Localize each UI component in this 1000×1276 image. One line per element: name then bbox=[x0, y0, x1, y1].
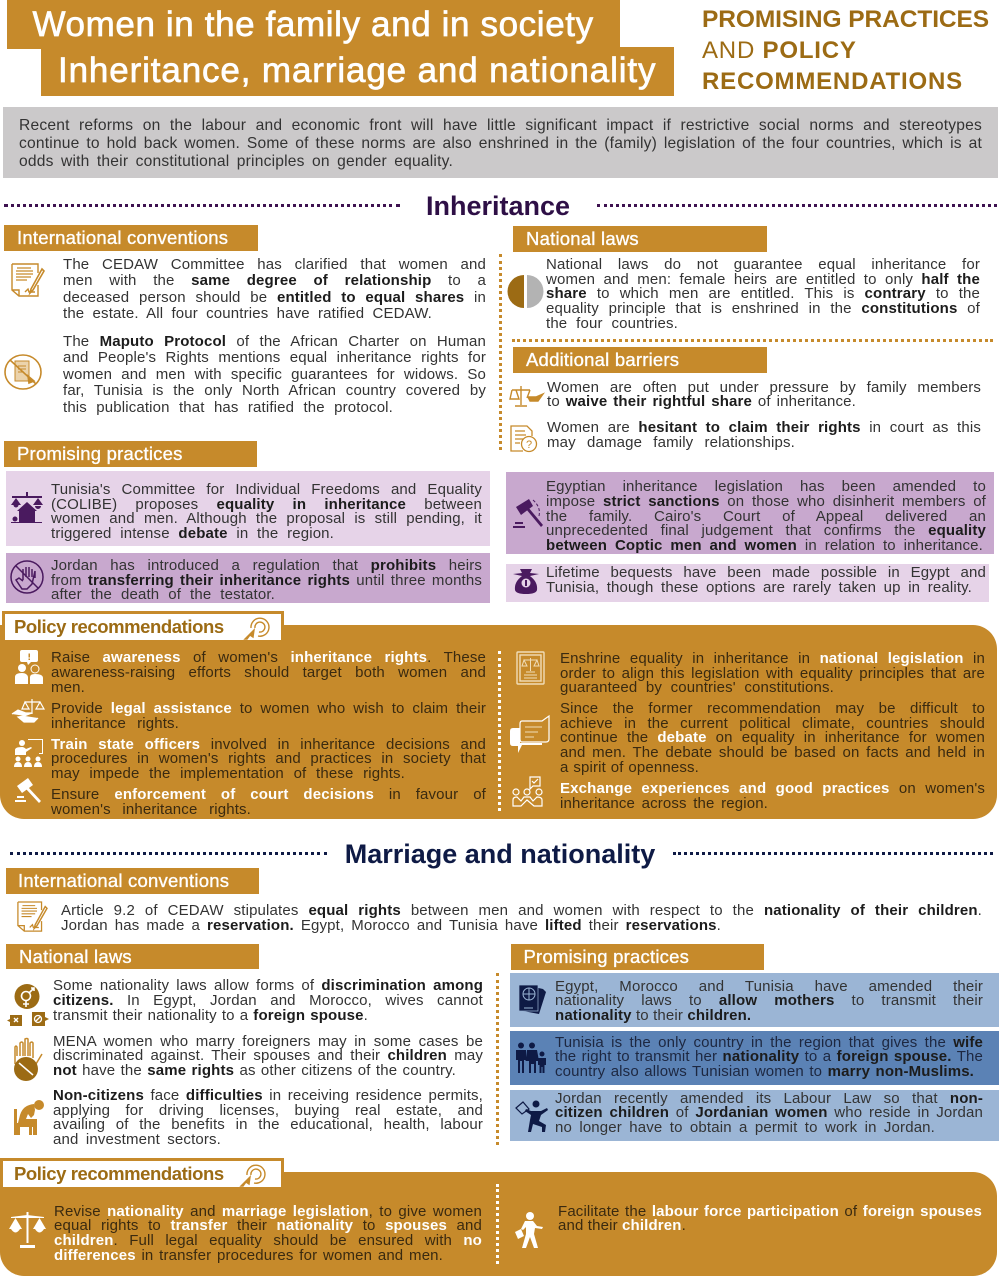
text: legal assistance: inheritance rights. bbox=[51, 715, 179, 732]
panel: policy recommendations, marriage and nationality bbox=[0, 1158, 997, 1276]
text: labour force participation: and their children. bbox=[558, 1217, 686, 1234]
icon: chat bubbles bbox=[510, 715, 550, 753]
text: barrier hesitant: may damage family relationships. bbox=[547, 434, 795, 451]
intro text: Recent reforms on the labour and economic front will have little significant impact if restrictive social norms and stereotypes bbox=[19, 117, 982, 134]
section header: international conventions: International conventions bbox=[18, 870, 229, 891]
text: debate: achieve in the current political climate, countries should bbox=[560, 715, 985, 732]
text: non-citizens: applying for driving licenses, buying real estate, and bbox=[53, 1102, 483, 1119]
text: national laws: equality principle that is enshrined in the constitutions of bbox=[546, 300, 980, 317]
icon: person with book bbox=[516, 1100, 548, 1132]
icon: family bbox=[515, 1042, 547, 1073]
text: Egypt legislation: Egyptian inheritance legislation has been amended to bbox=[546, 478, 986, 495]
text: national laws: women and men: female heirs are entitled to only half the bbox=[546, 271, 980, 288]
text: Tunisia COLIBE: Tunisia's Committee for Individual Freedoms and Equality bbox=[51, 481, 482, 498]
section header: promising practices bbox=[4, 441, 257, 466]
text: allow mothers: nationality laws to allow mothers to transmit their bbox=[555, 992, 983, 1009]
text: CEDAW committee: The CEDAW Committee has clarified that women and bbox=[63, 256, 486, 273]
icon: teacher and class bbox=[14, 739, 43, 767]
text: lifetime bequests bbox=[546, 564, 986, 596]
title: line 1: Women in the family and in society bbox=[32, 5, 594, 44]
icon: gavel bbox=[513, 499, 543, 528]
text: national laws: share to which men are entitled. This is contrary to the bbox=[546, 285, 980, 302]
text: non-citizens: availing of the benefits in the educational, health, labour bbox=[53, 1116, 483, 1133]
text: national laws: the four countries. bbox=[546, 315, 678, 332]
text: allow mothers bbox=[555, 980, 983, 1023]
text: barrier hesitant bbox=[547, 419, 981, 451]
text: MENA women: not have the same rights as other citizens of the country. bbox=[53, 1062, 456, 1079]
icon: signed document bbox=[11, 263, 45, 297]
text: Maputo protocol: and People's Rights mentions equal inheritance rights for bbox=[63, 349, 486, 366]
section header: promising practices: Promising practices bbox=[17, 443, 183, 464]
text: CEDAW committee bbox=[63, 256, 486, 322]
text: raise awareness: men. bbox=[51, 679, 85, 696]
text: CEDAW committee: men with the same degree of relationship to a bbox=[63, 272, 486, 289]
practice panel: Tunisia wife bbox=[510, 1031, 999, 1085]
text: non-citizens: Non-citizens face difficulties in receiving residence permits, bbox=[53, 1087, 483, 1104]
text: Egypt legislation: the family. Cairo's Court of Appeal delivered an bbox=[546, 508, 986, 525]
text: Maputo protocol: far, Tunisia is the only North African country covered by bbox=[63, 382, 486, 399]
text: allow mothers: Egypt, Morocco and Tunisia have amended their bbox=[555, 978, 983, 995]
text: barrier family pressure: Women are often put under pressure by family members bbox=[547, 379, 981, 396]
text: non-citizen children: citizen children of Jordanian women who reside in Jordan bbox=[555, 1104, 983, 1121]
text: legal assistance: Provide legal assistance to women who wish to claim their bbox=[51, 700, 486, 717]
section header: national laws bbox=[6, 944, 259, 969]
text: discrimination among citizens: Some nationality laws allow forms of discrimination among bbox=[53, 977, 483, 994]
heading: Inheritance: Inheritance bbox=[426, 191, 570, 221]
text: Egypt legislation: impose strict sanctions on those who disinherit members of bbox=[546, 493, 986, 510]
practice panel: lifetime bequests bbox=[506, 564, 989, 602]
practice panel: Tunisia COLIBE bbox=[6, 471, 490, 546]
text: article 9.2 bbox=[61, 902, 982, 934]
text: national legislation: guaranteed by countries' constitutions. bbox=[560, 679, 834, 696]
section header: national laws: National laws bbox=[526, 228, 639, 249]
icon: signed document bbox=[17, 901, 48, 932]
text: revise legislation: Revise nationality and marriage legislation, to give women bbox=[54, 1203, 482, 1220]
icon: crossed document bbox=[4, 354, 42, 390]
text: revise legislation: differences in transfer procedures for women and men. bbox=[54, 1247, 443, 1264]
icon: gavel bbox=[15, 778, 41, 803]
tab: policy recommendations bbox=[0, 1158, 284, 1189]
text: Egypt legislation: between Coptic men and women in relation to inheritance. bbox=[546, 537, 983, 554]
icon: gender symbol bbox=[7, 984, 49, 1026]
text: Jordan regulation: from transferring their inheritance rights until three months bbox=[51, 572, 482, 589]
icon: scale and hand bbox=[509, 386, 545, 407]
subtitle: promising practices and policy recommendations: AND POLICY bbox=[702, 37, 857, 64]
text: exchange experiences bbox=[560, 780, 985, 812]
text: Maputo protocol: The Maputo Protocol of the African Charter on Human bbox=[63, 333, 486, 350]
icon: scale bbox=[9, 1212, 46, 1248]
text: raise awareness bbox=[51, 649, 486, 696]
text: national legislation bbox=[560, 650, 985, 696]
text: lifetime bequests: Tunisia, though these options are rarely taken up in reality. bbox=[546, 579, 972, 596]
subtitle: promising practices and policy recommendations: PROMISING PRACTICES bbox=[702, 6, 989, 33]
icon: target arrow bbox=[241, 1163, 265, 1187]
text: debate: and men. The debate should be based on facts and held in bbox=[560, 744, 985, 761]
text: legal assistance bbox=[51, 700, 486, 732]
tab: policy recommendations: Policy recommendations bbox=[14, 1163, 224, 1184]
title: line 2: Inheritance, marriage and nationality bbox=[58, 51, 656, 90]
text: debate: a spirit of openness. bbox=[560, 759, 699, 776]
section header: promising practices: Promising practices bbox=[524, 946, 689, 967]
text: MENA women: discriminated against. Their spouses and their children may bbox=[53, 1047, 483, 1064]
text: debate bbox=[560, 700, 985, 776]
heading: Marriage and nationality: Marriage and nationality bbox=[345, 839, 655, 869]
text: discrimination among citizens: transmit their nationality to a foreign spouse. bbox=[53, 1007, 368, 1024]
section header: national laws: National laws bbox=[19, 946, 132, 966]
text: Tunisia COLIBE bbox=[51, 481, 482, 542]
icon: document question bbox=[510, 425, 538, 452]
icon: target arrow bbox=[243, 618, 270, 640]
text: raise awareness: Raise awareness of women's inheritance rights. These bbox=[51, 649, 486, 666]
text: non-citizens bbox=[53, 1089, 483, 1148]
text: train state officers: procedures in women's rights and practices in society that bbox=[51, 750, 486, 767]
text: train state officers: may impede the implementation of these rights. bbox=[51, 765, 405, 782]
text: Tunisia COLIBE: (COLIBE) proposes equality in inheritance between bbox=[51, 496, 482, 513]
intro text: odds with their constitutional principles on gender equality. bbox=[19, 153, 453, 170]
icon: hand with scale bbox=[12, 699, 45, 723]
tab: policy recommendations bbox=[2, 611, 284, 642]
icon: seated person bbox=[13, 1099, 44, 1135]
text: enforcement: women's inheritance rights. bbox=[51, 801, 251, 818]
practice panel: Egypt bbox=[506, 472, 994, 554]
icon: document question: ? bbox=[526, 439, 532, 451]
text: labour force participation: Facilitate the labour force participation of foreign spouses bbox=[558, 1203, 982, 1220]
section header: promising practices bbox=[510, 944, 764, 970]
text: Maputo protocol: women and men with specific guarantees for widows. So bbox=[63, 366, 486, 383]
text: Maputo protocol bbox=[63, 333, 486, 416]
text: revise legislation bbox=[54, 1205, 482, 1263]
text: Tunisia wife: Tunisia is the only country in the region that gives the wife bbox=[555, 1034, 983, 1051]
text: non-citizen children bbox=[555, 1092, 983, 1135]
practice panel: Jordan bbox=[6, 553, 490, 603]
text: train state officers bbox=[51, 736, 486, 782]
icon: group exchange bbox=[512, 776, 543, 807]
text: barrier hesitant: Women are hesitant to claim their rights in court as this bbox=[547, 419, 981, 436]
text: Egypt legislation: unprecedented final judgement that confirms the equality bbox=[546, 522, 986, 539]
text: raise awareness: awareness-raising efforts should target both women and bbox=[51, 664, 486, 681]
text: debate: continue the debate on equality in inheritance for women bbox=[560, 729, 985, 746]
icon: passport bbox=[519, 983, 546, 1014]
text: enforcement: Ensure enforcement of court decisions in favour of bbox=[51, 786, 486, 803]
icon: scale and house bbox=[11, 492, 43, 523]
text: Maputo protocol: this publication that has ratified the protocol. bbox=[63, 399, 393, 416]
icon: money bag bbox=[513, 569, 539, 594]
text: revise legislation: equal rights to transfer their nationality to spouses and bbox=[54, 1217, 482, 1234]
panel: policy recommendations, inheritance bbox=[0, 611, 997, 819]
section header: additional barriers: Additional barriers bbox=[526, 349, 679, 370]
text: revise legislation: children. Full legal equality should be ensured with no bbox=[54, 1232, 482, 1249]
text: discrimination among citizens: citizens. In Egypt, Jordan and Morocco, wives cannot bbox=[53, 992, 483, 1009]
text: CEDAW committee: the estate. All four countries have ratified CEDAW. bbox=[63, 305, 432, 322]
intro text: continue to hold back women. Some of these norms are also enshrined in the (family) legislation of the four countries, which is at bbox=[19, 135, 982, 152]
text: national laws bbox=[546, 256, 980, 332]
text: Jordan regulation: Jordan has introduced a regulation that prohibits heirs bbox=[51, 557, 482, 574]
icon: walking person bbox=[515, 1212, 543, 1248]
text: barrier family pressure bbox=[547, 379, 981, 410]
text: Tunisia wife: the right to transmit her nationality to a foreign spouse. The bbox=[555, 1048, 983, 1065]
text: Tunisia COLIBE: women and men. Although the proposal is still pending, it bbox=[51, 510, 482, 527]
icon: stop hand bbox=[13, 1038, 44, 1081]
text: exchange experiences: inheritance across the region. bbox=[560, 795, 768, 812]
section header: international conventions bbox=[4, 225, 258, 250]
text: national laws: National laws do not guarantee equal inheritance for bbox=[546, 256, 980, 273]
text: article 9.2: Article 9.2 of CEDAW stipulates equal rights between men and women with respect to the nationality of their children. bbox=[61, 902, 982, 919]
intro text bbox=[19, 117, 982, 170]
text: CEDAW committee: deceased person should be entitled to equal shares in bbox=[63, 289, 486, 306]
text: national legislation: order to align this legislation with equality principles that are bbox=[560, 665, 985, 682]
text: non-citizens: and investment sectors. bbox=[53, 1131, 221, 1148]
section header: international conventions bbox=[6, 868, 259, 894]
practice panel: Jordan labour law bbox=[510, 1090, 999, 1141]
tab: policy recommendations: Policy recommendations bbox=[14, 616, 224, 637]
section header: additional barriers bbox=[513, 347, 767, 372]
section header: international conventions: International conventions bbox=[17, 227, 228, 248]
text: lifetime bequests: Lifetime bequests have been made possible in Egypt and bbox=[546, 564, 986, 581]
text: discrimination among citizens bbox=[53, 977, 483, 1024]
text: MENA women: MENA women who marry foreigners may in some cases be bbox=[53, 1033, 483, 1050]
intro panel bbox=[3, 107, 998, 178]
icon: framed constitution bbox=[516, 651, 545, 685]
text: train state officers: Train state officers involved in inheritance decisions and bbox=[51, 736, 486, 753]
icon: people with speech bubble bbox=[15, 650, 43, 684]
text: Jordan regulation: after the death of the testator. bbox=[51, 586, 275, 603]
text: exchange experiences: Exchange experiences and good practices on women's bbox=[560, 780, 985, 797]
text: Egypt legislation bbox=[546, 478, 986, 554]
icon: half circle bbox=[508, 275, 544, 308]
text: Jordan regulation bbox=[51, 557, 482, 603]
icon: prohibited hand bbox=[10, 560, 44, 594]
text: barrier family pressure: to waive their rightful share of inheritance. bbox=[547, 393, 856, 410]
subtitle: promising practices and policy recommendations: RECOMMENDATIONS bbox=[702, 68, 963, 95]
text: national legislation: Enshrine equality in inheritance in national legislation in bbox=[560, 650, 985, 667]
text: labour force participation bbox=[558, 1205, 982, 1234]
text: Tunisia wife: country also allows Tunisian women to marry non-Muslims. bbox=[555, 1063, 974, 1080]
text: allow mothers: nationality to their children. bbox=[555, 1006, 751, 1024]
subtitle: promising practices and policy recommendations bbox=[702, 6, 989, 95]
text: article 9.2: Jordan has made a reservation. Egypt, Morocco and Tunisia have lifted their reservations. bbox=[61, 917, 721, 934]
text: debate: Since the former recommendation may be difficult to bbox=[560, 700, 985, 717]
text: non-citizen children: no longer have to obtain a permit to work in Jordan. bbox=[555, 1119, 935, 1136]
text: enforcement bbox=[51, 786, 486, 818]
section header: national laws bbox=[513, 226, 767, 252]
text: Tunisia wife bbox=[555, 1036, 983, 1079]
practice panel: mothers transmit nationality bbox=[510, 973, 999, 1027]
text: non-citizen children: Jordan recently amended its Labour Law so that non- bbox=[555, 1090, 983, 1107]
text: Tunisia COLIBE: triggered intense debate in the region. bbox=[51, 525, 334, 542]
text: MENA women bbox=[53, 1035, 483, 1079]
